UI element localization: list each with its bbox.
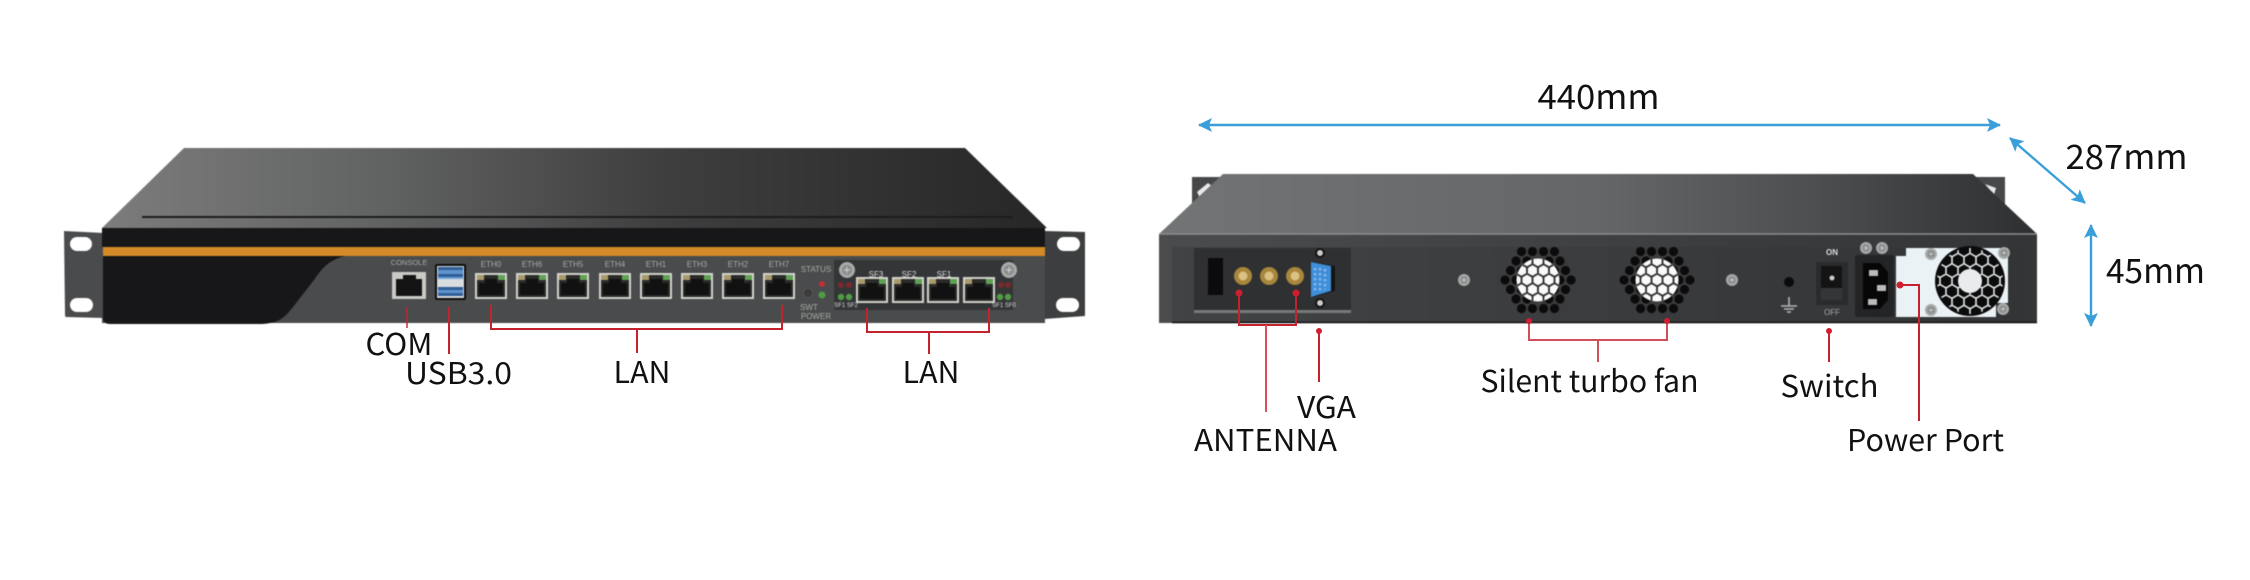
callout: Silent turbo fan: Silent turbo fan [1480,357,1698,401]
callout: Silent turbo fan [1480,318,1698,401]
VGA connector [1311,249,1335,307]
status panel: POWER [801,312,831,321]
top plate [102,148,1047,228]
status panel: STATUS [801,265,831,274]
rocker switch: OFF [1824,308,1840,317]
rocker switch: ON [1826,248,1838,257]
antenna connectors [1234,267,1304,285]
callout: LAN SFP ports: LAN [902,348,960,392]
panel: front view [64,148,1085,393]
dimension: height 45mm: 45mm [2106,244,2205,293]
power supply with fan [1896,246,2010,317]
callout: VGA: VGA [1297,383,1357,427]
front face [102,228,1045,323]
inner recessed panel [1172,247,2024,322]
SFP module: SF1 [937,270,952,279]
chassis screws [1458,274,1738,286]
device: rear chassis [1159,174,2037,323]
left rack ear [64,231,104,318]
USB 3.0 ports [435,264,466,300]
SFP module: SF1 SF0 [992,303,1016,309]
ETH ports: ETH6 [522,260,543,269]
fan 2 [1619,247,1695,313]
callout: Switch [1780,328,1878,406]
SFP module: SF2 [902,270,917,279]
console port [391,258,427,299]
top plate slot [142,216,1013,218]
callout: VGA [1297,328,1357,427]
ETH ports: ETH4 [605,260,626,269]
IO plate [1194,248,1351,313]
SFP module [834,260,1017,310]
rocker switch [1816,248,1848,317]
callout: ANTENNA [1194,290,1338,460]
callout: COM: COM [366,320,432,364]
fan 1 [1500,247,1576,313]
callout: ANTENNA: ANTENNA [1194,416,1338,460]
dimension: depth 287mm: 287mm [2066,130,2188,179]
callout: Power Port [1847,282,2004,460]
callout: USB3.0 [405,307,512,393]
panel: rear view [1159,70,2205,460]
console port: CONSOLE [391,258,427,267]
top plate [1159,174,2037,234]
callout: Power Port: Power Port [1847,416,2004,460]
ETH ports: ETH3 [687,260,708,269]
device: front chassis [64,148,1085,324]
power inlet [1855,242,1894,317]
status panel [800,265,831,321]
orange stripe [103,247,1045,256]
SFP module: SF1 SF2 [834,303,858,309]
face edge highlight [1159,233,2037,235]
callout: Switch: Switch [1780,362,1878,406]
black swoosh [103,256,346,324]
right rack ear [1044,231,1085,319]
ETH ports: ETH5 [563,260,584,269]
dimension: height 45mm [2091,225,2205,326]
SFP module: SF3 [869,270,884,279]
ETH ports: ETH1 [646,260,667,269]
ETH ports: ETH2 [728,260,749,269]
callout: LAN SFP ports [867,308,989,392]
rear rack ears [1192,177,2005,206]
ETH ports [475,260,795,299]
dimension: depth 287mm [2010,130,2188,203]
ETH ports: ETH0 [481,260,502,269]
ground terminal [1781,277,1797,312]
rear face [1159,234,2037,323]
dark upper band [102,228,1045,247]
dimension: width 440mm: 440mm [1538,70,1660,119]
ETH ports: ETH7 [769,260,790,269]
callout: LAN ETH ports: LAN [614,348,670,392]
status panel: SWT [800,303,818,312]
bottom shadow line [1172,322,2037,324]
callout: USB3.0: USB3.0 [405,349,512,393]
callout: LAN ETH ports [491,305,782,392]
